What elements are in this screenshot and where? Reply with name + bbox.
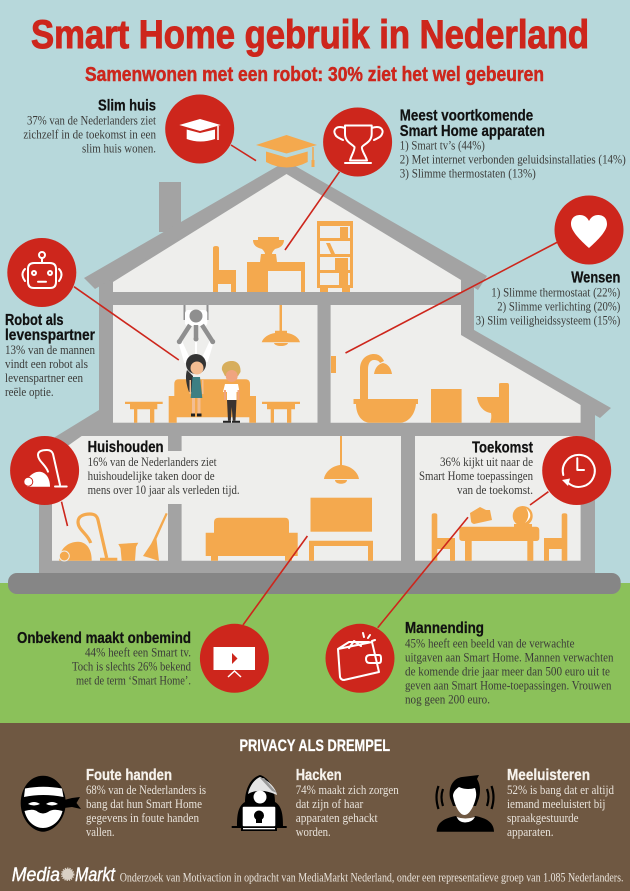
- text: foute handen: gegevens in foute handen: [86, 810, 199, 825]
- icon: robot badge: [7, 238, 76, 307]
- text: robot als levenspartner: levenspartner: [5, 327, 95, 344]
- icon: wallet badge: [326, 624, 394, 693]
- heading: privacy: PRIVACY ALS DREMPEL: [240, 736, 390, 755]
- text: slim huis: 37% van de Nederlanders ziet: [27, 113, 156, 128]
- text: hacken: [296, 767, 399, 839]
- text: mannending: [405, 620, 614, 706]
- connector: robot: [74, 287, 179, 360]
- broom: [143, 513, 168, 561]
- text: onbekend maakt onbemind: [17, 630, 191, 688]
- living room lamp: [262, 305, 300, 346]
- connector: toekomst: [530, 492, 548, 505]
- logo: MediaMarkt: Media: [12, 865, 60, 886]
- icon: vacuum badge: [10, 436, 79, 505]
- chair: [213, 246, 236, 292]
- second floor right room: [331, 305, 581, 423]
- subtitle: Samenwonen met een robot: 30% ziet het wel gebeuren: [85, 63, 544, 86]
- text: onbekend maakt onbemind: 44% heeft een Smart tv.: [85, 645, 191, 660]
- sofa upstairs: [169, 379, 256, 423]
- text: slim huis: Slim huis: [98, 98, 156, 115]
- text: meeluisteren: 52% is bang dat er altijd: [507, 782, 614, 797]
- connector: apparaten: [285, 172, 340, 250]
- text: mannending: Mannending: [405, 620, 484, 637]
- icon: screen badge: [200, 624, 269, 693]
- television: [310, 498, 372, 532]
- attic room: [113, 174, 461, 292]
- text: robot als levenspartner: 13% van de mannen: [5, 342, 95, 357]
- chimney: [159, 182, 181, 232]
- text: hacken: dat zijn of haar: [296, 796, 364, 811]
- text: meeluisteren: spraakgestuurde: [507, 810, 579, 825]
- house walls: [39, 170, 595, 573]
- text: meeluisteren: iemand meeluistert bij: [507, 796, 605, 811]
- ground floor lamp: [324, 436, 359, 484]
- text: slim huis: [23, 98, 156, 156]
- icon: hacker: [232, 775, 287, 831]
- books: [326, 227, 348, 285]
- text: mannending: 45% heeft een beeld van de verwachte: [405, 635, 575, 650]
- text: toekomst: Toekomst: [472, 440, 533, 457]
- text: onbekend maakt onbemind: Onbekend maakt onbemind: [17, 630, 191, 647]
- roof lower right: [461, 330, 611, 418]
- text: robot als levenspartner: Robot als: [5, 312, 64, 329]
- text: hacken: Hacken: [296, 767, 342, 784]
- robot arm: [177, 305, 215, 362]
- icon: heart badge: [554, 196, 624, 264]
- logo: MediaMarkt: Markt: [75, 865, 116, 886]
- text: huishouden: huishoudelijke taken door de: [88, 468, 215, 483]
- desk: [247, 262, 305, 292]
- text: robot als levenspartner: levenspartner een: [5, 370, 83, 385]
- text: onbekend maakt onbemind: Toch is slechts 26% bekend: [72, 659, 191, 674]
- text: onbekend maakt onbemind: met de term ‘Smart Home’.: [76, 673, 191, 688]
- text: meeluisteren: [507, 767, 614, 839]
- privacy background: [0, 723, 630, 891]
- text: meeluisteren: apparaten.: [507, 824, 554, 839]
- side tables: [125, 402, 300, 423]
- second floor left room: [113, 305, 318, 423]
- man: [222, 361, 241, 423]
- text: foute handen: vallen.: [86, 824, 114, 839]
- icon: clock badge: [542, 436, 611, 505]
- bath with shower: [354, 354, 418, 423]
- text: toekomst: 36% kijkt uit naar de: [440, 454, 533, 469]
- ground floor left room: [52, 436, 401, 561]
- connector: onbekend: [243, 536, 307, 625]
- connector: huishouden: [62, 502, 68, 526]
- crystal ball: [513, 506, 533, 526]
- lawn: [0, 583, 630, 723]
- vacuum cleaner: [59, 514, 117, 561]
- text: foute handen: 68% van de Nederlanders is: [86, 782, 206, 797]
- text: slim huis: slim huis wonen.: [82, 141, 156, 156]
- text: toekomst: [419, 440, 533, 497]
- text: meest voorkomende: 1) Smart tv’s (44%): [400, 138, 485, 153]
- connector: wensen: [346, 242, 558, 353]
- text: slim huis: zichzelf in de toekomst in een: [23, 127, 156, 142]
- text: hacken: 74% maakt zich zorgen: [296, 782, 399, 797]
- toilet: [477, 383, 509, 423]
- dining set: [432, 506, 567, 561]
- connector: slim huis: [231, 145, 256, 161]
- sofa downstairs: [206, 518, 298, 561]
- trophy: [253, 237, 284, 262]
- tv stand: [309, 541, 373, 561]
- text: hacken: apparaten gehackt: [296, 810, 378, 825]
- wallet on table: [470, 507, 492, 524]
- bathroom: [331, 354, 509, 423]
- logo: MediaMarkt: [12, 865, 116, 886]
- woman: [186, 354, 206, 416]
- text: wensen: Wensen: [571, 270, 620, 287]
- text: huishouden: [88, 439, 240, 497]
- foundation: [8, 573, 621, 594]
- text: toekomst: Smart Home toepassingen: [419, 468, 533, 483]
- text: foute handen: [86, 767, 206, 839]
- text: meest voorkomende: 3) Slimme thermostaten (13%): [400, 166, 536, 181]
- text: meest voorkomende: Smart Home apparaten: [400, 123, 545, 140]
- text: mannending: nog geen 200 euro.: [405, 691, 490, 706]
- text: huishouden: 16% van de Nederlanders ziet: [88, 454, 217, 469]
- icon: listener: [436, 775, 494, 832]
- text: meest voorkomende: [400, 108, 626, 181]
- wall switch: [331, 356, 336, 373]
- text: toekomst: van de toekomst.: [457, 482, 533, 497]
- bookshelf: [317, 221, 353, 292]
- icon: graduation cap on roof: [256, 135, 317, 168]
- icon: masked thief: [21, 776, 81, 832]
- house illustration: [8, 161, 621, 594]
- icon: trophy badge: [323, 108, 392, 176]
- icon: graduation cap badge: [165, 94, 234, 164]
- ground floor right room: [415, 436, 581, 561]
- sky background: [0, 0, 630, 590]
- text: meeluisteren: Meeluisteren: [507, 767, 590, 784]
- connector: mannending: [378, 517, 468, 628]
- roof upper: [84, 161, 487, 290]
- text: huishouden: mens over 10 jaar als verleden tijd.: [88, 482, 240, 497]
- cabinet: [431, 389, 462, 423]
- text: robot als levenspartner: reële optie.: [5, 384, 54, 399]
- text: robot als levenspartner: [5, 312, 95, 399]
- text: huishouden: Huishouden: [88, 439, 164, 456]
- text: hacken: worden.: [296, 824, 331, 839]
- text: wensen: [476, 270, 620, 327]
- bucket: [118, 543, 138, 561]
- attic furniture: [213, 221, 353, 292]
- text: robot als levenspartner: vindt een robot als: [5, 356, 88, 371]
- text: meest voorkomende: Meest voortkomende: [400, 108, 534, 125]
- text: foute handen: Foute handen: [86, 767, 172, 784]
- text: foute handen: bang dat hun Smart Home: [86, 796, 202, 811]
